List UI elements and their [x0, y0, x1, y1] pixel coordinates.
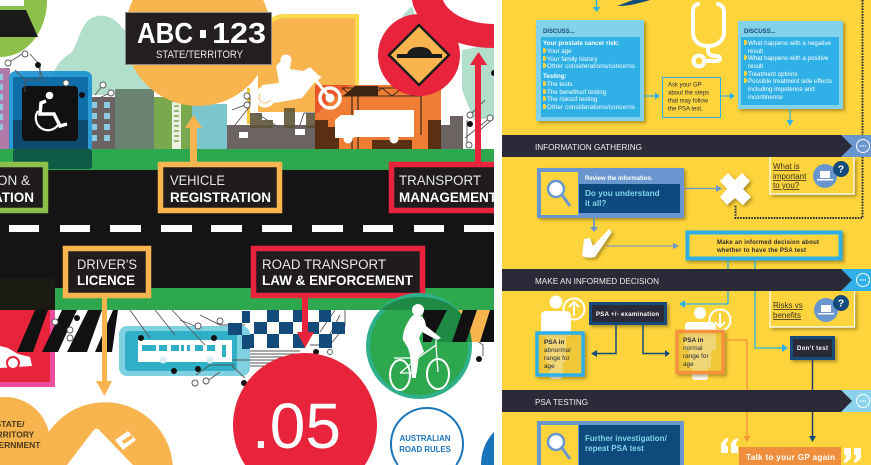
normal range box: range for	[683, 353, 709, 360]
callout: risks vs benefits	[770, 291, 854, 327]
split arrowheads	[591, 350, 670, 357]
ask your GP box	[662, 78, 720, 118]
discuss box 2: result	[748, 63, 763, 70]
arrow into first discuss box	[596, 0, 598, 8]
person with up arrow	[541, 296, 584, 379]
bar: PSA testing: PSA TESTING	[535, 398, 588, 407]
orange arrow stem	[190, 149, 197, 163]
green circle with laptop icon	[0, 0, 47, 57]
don't test box: Don't test	[797, 346, 828, 352]
abnormal range box	[537, 333, 583, 375]
PSA examination box: PSA +/- examination	[596, 312, 659, 318]
callout: what is important to you: What is	[773, 162, 800, 171]
red arrow down	[297, 298, 314, 348]
navy connector	[812, 360, 814, 438]
cyclist circle	[366, 293, 472, 399]
circuit lines top	[8, 54, 494, 145]
yellow-edged orange leaf	[272, 14, 359, 85]
discuss box 1: The tests	[547, 81, 572, 88]
review box: it all?	[585, 199, 606, 208]
ask your GP box: Ask your GP	[668, 82, 702, 88]
callout: risks vs benefits: benefits	[773, 311, 801, 320]
mint tree right	[397, 6, 494, 120]
label: driver's licence	[66, 248, 148, 296]
pink and red square with car	[0, 310, 55, 387]
road dashes	[9, 225, 494, 232]
normal range box: PSA in	[683, 337, 703, 344]
white cross	[720, 173, 751, 205]
label: transport management: TRANSPORT	[399, 173, 481, 188]
discuss box 1: Your prostate cancer risk:	[543, 40, 619, 47]
red arrow stem	[475, 149, 481, 163]
callout: what is important to you: important	[773, 172, 807, 181]
callout: what is important to you: to you?	[773, 181, 800, 190]
label: education	[0, 164, 46, 210]
number plate: STATE/TERRITORY	[156, 49, 244, 61]
ask your GP box: that may follow	[668, 98, 709, 104]
navy speech tail	[617, 0, 650, 6]
arrow to second discuss box	[720, 95, 731, 97]
circuit lines bottom	[130, 310, 483, 382]
motorcycle	[254, 54, 340, 108]
number plate	[126, 12, 272, 64]
label: transport management: MANAGEMENT	[399, 190, 498, 205]
abnormal range box: range for	[544, 355, 570, 362]
navy arrowhead	[809, 436, 816, 442]
chequered police band	[228, 310, 345, 349]
discuss box 2: What happens with a positive	[748, 55, 829, 62]
hazard stripes right	[423, 310, 494, 342]
label: vehicle registration: REGISTRATION	[170, 190, 271, 205]
cyclist	[390, 304, 449, 390]
arrow to check	[593, 218, 595, 228]
abnormal range box: abnormal	[544, 347, 571, 354]
white check mark	[582, 229, 612, 258]
abnormal range box: PSA in	[544, 339, 564, 346]
callout: risks vs benefits: Risks vs	[773, 301, 803, 310]
mint tree left	[52, 16, 152, 95]
bus panel	[119, 326, 250, 376]
orange circle	[125, 0, 271, 106]
delivery truck	[335, 110, 414, 144]
ask your GP box: about the steps	[668, 90, 709, 96]
decision box	[688, 232, 840, 258]
discuss box 1: The risksof testing	[547, 96, 598, 103]
closing quote	[844, 448, 861, 463]
australian road rules circle: ROAD RULES	[399, 445, 451, 454]
magnifier icon 2	[548, 434, 570, 459]
talk to your GP box: Talk to your GP again	[746, 453, 835, 462]
state government cloud	[0, 397, 173, 465]
callout: what is important to you	[770, 157, 854, 194]
orange arrowhead	[744, 436, 750, 442]
orange connector	[725, 340, 747, 438]
callout: risks vs benefits: ?	[838, 298, 844, 310]
dotted feedback line	[736, 0, 862, 218]
decision branch lines	[684, 260, 783, 348]
review box	[537, 168, 684, 218]
label: road transport law and enforcement: ROAD TRANSPORT	[262, 257, 386, 272]
label: driver's licence: DRIVER'S	[77, 257, 137, 272]
branch arrowheads	[679, 300, 788, 352]
bar: information gathering	[502, 135, 871, 157]
discuss box 1: Other considerations/concerns	[547, 63, 635, 70]
green verge top	[0, 149, 494, 170]
discuss box 1	[536, 20, 644, 121]
arrow to GP box	[644, 95, 656, 97]
discuss box 1: Your family history	[547, 56, 598, 63]
discuss box 2: including impotence and	[748, 86, 815, 93]
opening quote	[721, 438, 738, 453]
discuss box 1: Your age	[547, 48, 572, 55]
discuss box 2: Treatment options	[748, 71, 798, 78]
label: road transport law and enforcement	[254, 248, 422, 296]
further investigation box	[537, 421, 684, 465]
label: vehicle registration	[160, 164, 280, 210]
discuss box 2: incontinence	[748, 94, 783, 101]
discuss box 2	[738, 21, 843, 109]
australian road rules circle	[391, 408, 463, 465]
australian road rules circle: AUSTRALIAN	[400, 434, 451, 443]
decision box: whether to have the PSA test	[716, 248, 806, 254]
0.05 red circle: .05	[252, 390, 341, 462]
label: driver's licence: LICENCE	[77, 273, 135, 288]
label: road transport law and enforcement: LAW & ENFORCEMENT	[262, 273, 414, 288]
solid blue circle	[481, 432, 494, 465]
ask your GP box: the PSA test.	[668, 106, 703, 112]
bar: PSA testing	[502, 390, 871, 412]
bar: information gathering: INFORMATION GATHERING	[535, 143, 642, 152]
left panel: road infographic	[0, 0, 512, 465]
don't test box	[790, 336, 835, 360]
red roundabout sign	[378, 0, 494, 96]
arrow to cross	[684, 188, 718, 190]
orange arrow down	[96, 298, 112, 396]
0.05 red circle	[233, 353, 377, 465]
discuss box 1: The benefitsof testing	[547, 89, 607, 96]
road	[0, 170, 494, 289]
arrow below discuss box 2	[789, 109, 791, 121]
stethoscope icon	[693, 4, 724, 66]
discuss box 2: What happens with a negative	[748, 40, 831, 47]
buildings row	[0, 68, 463, 150]
review box: Do you understand	[585, 189, 660, 198]
discuss box 1: Testing:	[543, 73, 567, 80]
normal range box: normal	[683, 345, 703, 352]
construction block	[315, 85, 441, 149]
abnormal range box: age	[544, 363, 555, 370]
hazard stripes	[17, 310, 118, 352]
normal range box: age	[683, 361, 694, 368]
magnifier icon	[548, 181, 570, 206]
accessibility panel	[9, 71, 92, 149]
red arrow up	[470, 52, 487, 149]
number plate: 123	[212, 18, 266, 50]
bar: make an informed decision	[502, 269, 871, 291]
discuss box 2: DISCUSS...	[744, 29, 776, 35]
orange arrow up	[185, 115, 202, 149]
normal range box	[677, 332, 723, 372]
arrow to decision box	[606, 245, 674, 247]
split arrows	[595, 325, 666, 354]
right panel: PSA flowchart	[502, 0, 871, 465]
label: vehicle registration: VEHICLE	[170, 173, 225, 188]
person with down arrow	[685, 307, 730, 380]
callout: what is important to you: ?	[838, 164, 844, 176]
further investigation box: repeat PSA test	[585, 444, 644, 453]
PSA examination box	[589, 302, 667, 325]
green verge bottom	[55, 288, 494, 310]
label: transport management	[392, 164, 512, 210]
review box: Review the information.	[585, 176, 653, 182]
further investigation box: Further investigation/	[585, 434, 668, 443]
discuss box 1: DISCUSS...	[543, 29, 575, 35]
discuss box 2: result	[748, 48, 763, 55]
decision box: Make an informed decision about	[717, 240, 819, 246]
discuss box 2: Possible treatment side effects	[748, 78, 832, 85]
number plate: ABC	[137, 18, 193, 50]
discuss box 1: Other considerations/concerns	[547, 104, 635, 111]
bar: make an informed decision: MAKE AN INFORMED DECISION	[535, 277, 659, 286]
talk to your GP box	[739, 447, 841, 465]
